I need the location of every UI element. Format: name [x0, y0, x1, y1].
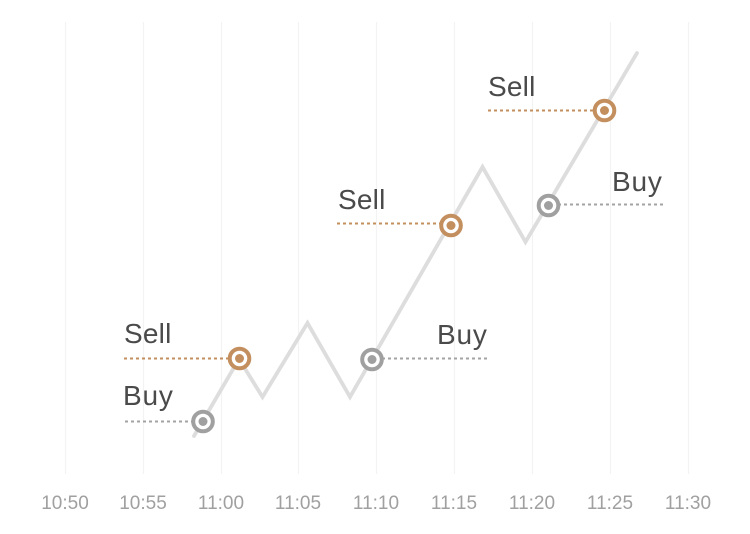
time axis labels: 11:15: [431, 493, 477, 514]
buy marker at 11:21: [539, 166, 664, 215]
time axis labels: 11:25: [587, 493, 633, 514]
time axis labels: 11:05: [275, 493, 321, 514]
price line: [194, 53, 637, 436]
time axis labels: [41, 493, 711, 514]
buy marker at 11:10: Buy: [437, 319, 488, 350]
sell marker at 11:25: Sell: [488, 71, 536, 102]
time axis labels: 11:30: [665, 493, 711, 514]
buy marker at 11:21: Buy: [612, 166, 663, 197]
sell marker at 11:01: Sell: [124, 318, 172, 349]
time axis labels: 11:00: [198, 493, 244, 514]
time axis labels: 10:50: [41, 493, 89, 514]
sell marker at 11:15: [337, 184, 461, 235]
time axis labels: 11:10: [353, 493, 399, 514]
buy marker at 10:59: Buy: [123, 380, 174, 411]
sell marker at 11:01: [124, 318, 249, 368]
sell marker at 11:15: Sell: [338, 184, 386, 215]
time axis labels: 10:55: [119, 493, 167, 514]
buy marker at 11:10: [362, 319, 488, 369]
buy marker at 10:59: [123, 380, 213, 431]
sell marker at 11:25: [488, 71, 614, 120]
time axis labels: 11:20: [509, 493, 555, 514]
